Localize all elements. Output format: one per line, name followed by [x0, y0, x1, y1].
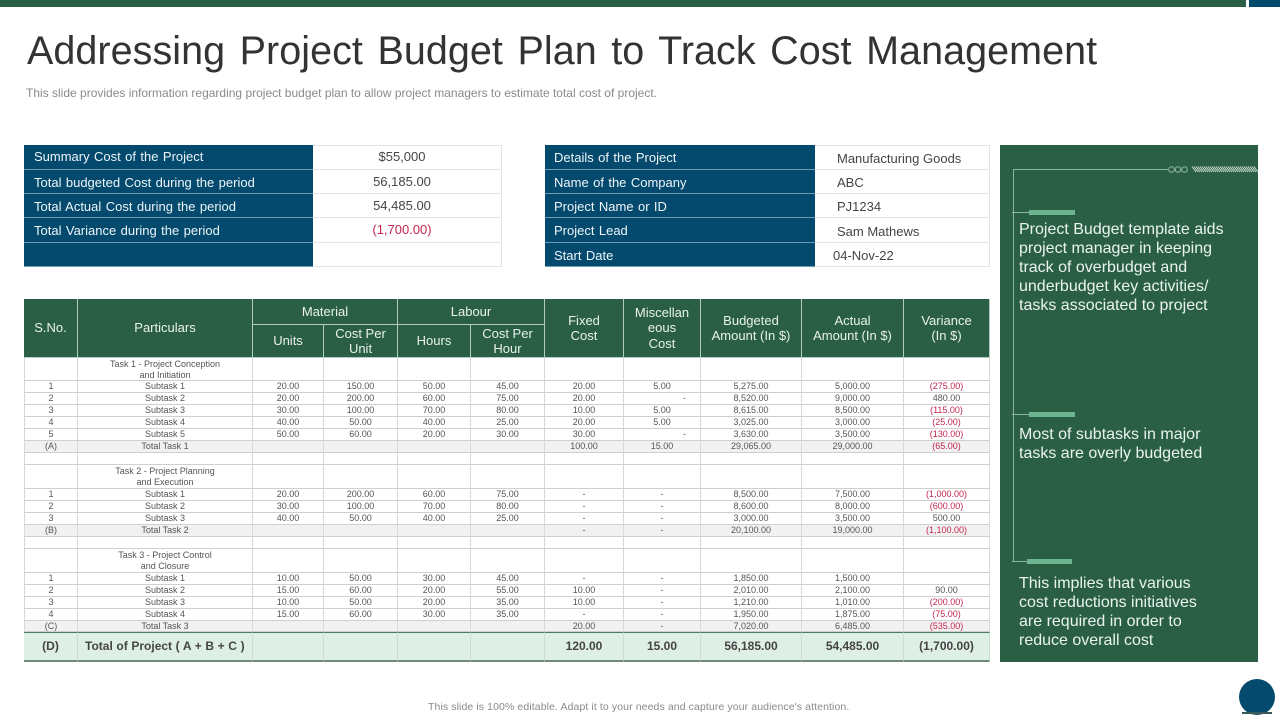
table header: [24, 299, 990, 358]
task 2 rows: Subtask 1: [145, 489, 185, 499]
summary cost table: [24, 145, 502, 267]
task 1 rows: 3,000.00: [835, 417, 870, 427]
task 1 rows: Subtask 5: [145, 429, 185, 439]
takeaway marker 1: [1012, 210, 1075, 215]
task 1 rows: 40.00: [277, 417, 299, 427]
takeaway text 1: [1019, 221, 1224, 314]
task 2 rows: 1: [48, 489, 54, 499]
summary cost table: Total budgeted Cost during the period: [34, 174, 255, 190]
subtitle: This slide provides information regarding project budget plan to allow project managers to estimate total cost of project.: [26, 86, 657, 100]
task 2 rows: 20.00: [277, 489, 299, 499]
title: Addressing Project Budget Plan to Track Cost Management: [27, 29, 1097, 73]
task 1 rows: 5.00: [653, 417, 671, 427]
task 3 rows: (75.00): [932, 609, 961, 619]
task 1 rows: Task 1 - Project Conception: [110, 358, 220, 368]
task 1 rows: (130.00): [930, 429, 963, 439]
project details table: ABC: [837, 174, 864, 190]
summary cost table: Summary Cost of the Project: [34, 148, 203, 164]
task 3 rows: Subtask 1: [145, 573, 185, 583]
grand total row: 15.00: [647, 639, 677, 653]
task 1 rows: 3,500.00: [835, 429, 870, 439]
panel: key takeaways: [1000, 145, 1258, 662]
task 3 rows: 10.00: [277, 573, 299, 583]
task 1 rows: 29,000.00: [832, 441, 873, 451]
table header: Hour: [493, 341, 522, 356]
task 1 rows: 20.00: [573, 417, 595, 427]
task 3 rows: 20.00: [423, 597, 445, 607]
takeaway text 3: [1019, 575, 1197, 649]
task 3 rows: 15.00: [277, 585, 299, 595]
task 2 rows: -: [661, 513, 664, 523]
task 1 rows: 8,500.00: [835, 405, 870, 415]
task 3 rows: 3: [48, 597, 54, 607]
task 3 rows: 20.00: [573, 621, 595, 631]
task 1 rows: (65.00): [932, 441, 961, 451]
task 2 rows: (1,000.00): [926, 489, 967, 499]
grand total row: Total of Project ( A + B + C ): [85, 639, 245, 653]
grand total row: [24, 632, 990, 662]
task 3 rows: 10.00: [277, 597, 299, 607]
table header: Budgeted: [723, 312, 779, 328]
task 2 rows: Task 2 - Project Planning: [115, 466, 215, 476]
task 2 rows: -: [661, 525, 664, 535]
task 1 rows: 100.00: [347, 405, 374, 415]
panel frame decoration: [1013, 166, 1258, 561]
task 2 rows: -: [583, 513, 586, 523]
task 1 rows: 15.00: [651, 441, 673, 451]
table header: eous: [648, 320, 676, 335]
task 2 rows: 70.00: [423, 501, 445, 511]
summary cost table: 56,185.00: [373, 174, 431, 189]
task 3 rows: 1,850.00: [733, 573, 769, 583]
task 1 rows: 20.00: [277, 381, 299, 391]
task 3 rows: 10.00: [573, 597, 595, 607]
task 1 rows: 5.00: [653, 381, 671, 391]
task 3 rows: 1,210.00: [733, 597, 769, 607]
table header: Labour: [451, 304, 491, 319]
task 1 rows: 20.00: [423, 429, 445, 439]
project details table: Start Date: [554, 248, 613, 262]
task 3 rows: -: [583, 573, 586, 583]
takeaway text 1: Project Budget template aids: [1019, 221, 1224, 238]
task 1 rows: Subtask 2: [145, 393, 185, 403]
task 1 rows: (A): [45, 441, 57, 451]
grand total row: 56,185.00: [724, 639, 778, 653]
task 3 rows: 4: [48, 609, 54, 619]
task 3 rows: 90.00: [935, 585, 958, 595]
table header: Unit: [349, 341, 372, 356]
task 1 rows: 200.00: [347, 393, 374, 403]
table header: Material: [302, 304, 348, 319]
grand total row: 120.00: [566, 639, 602, 653]
task 3 rows: -: [661, 573, 664, 583]
task 1 rows: 8,520.00: [733, 393, 769, 403]
task 1 rows: 45.00: [496, 381, 519, 391]
table header: Cost Per: [482, 326, 533, 340]
takeaway text 2: [1019, 426, 1202, 462]
task 1 rows: -: [683, 393, 686, 403]
task 1 rows: 60.00: [349, 429, 372, 439]
task 3 rows: 1,500.00: [835, 573, 870, 583]
task 2 rows: -: [583, 525, 586, 535]
task 3 rows: -: [661, 609, 664, 619]
task 1 rows: 29,065.00: [731, 441, 771, 451]
project details table: PJ1234: [837, 198, 881, 214]
task 1 rows: Subtask 1: [145, 381, 185, 391]
task 1 rows: 10.00: [573, 405, 595, 415]
task 3 rows: 2,100.00: [835, 585, 870, 595]
task 3 rows: Subtask 3: [145, 597, 185, 607]
task 3 rows: Task 3 - Project Control: [118, 550, 212, 560]
task 1 rows: 50.00: [277, 429, 299, 439]
task 1 rows: 5,000.00: [835, 381, 870, 391]
task 2 rows: 75.00: [496, 489, 519, 499]
task 2 rows: 100.00: [347, 501, 374, 511]
task 3 rows: 35.00: [496, 609, 519, 619]
summary cost table: Total Actual Cost during the period: [34, 198, 236, 214]
task 1 rows: 5: [48, 429, 54, 439]
takeaway text 1: project manager in keeping: [1019, 240, 1212, 257]
task 3 rows: 60.00: [349, 609, 372, 619]
task 2 rows: -: [661, 489, 664, 499]
task 2 rows: 60.00: [423, 489, 445, 499]
task 3 rows: 50.00: [349, 597, 372, 607]
task 2 rows: 3: [48, 513, 54, 523]
table header: Particulars: [134, 320, 196, 335]
task 2 rows: 7,500.00: [835, 489, 870, 499]
task 1 rows: 150.00: [347, 381, 374, 391]
task 2 rows: 50.00: [349, 513, 372, 523]
footer note: This slide is 100% editable. Adapt it to your needs and capture your audience's attention.: [428, 701, 849, 713]
task 2 rows: Subtask 3: [145, 513, 185, 523]
table header: Fixed: [568, 312, 600, 328]
task 2 rows: [24, 465, 990, 549]
task 3 rows: -: [661, 621, 664, 631]
project budget table: [24, 299, 990, 662]
task 1 rows: 8,615.00: [733, 405, 769, 415]
task 1 rows: and Initiation: [139, 370, 191, 380]
task 2 rows: (B): [45, 525, 57, 535]
task 3 rows: 30.00: [423, 573, 445, 583]
table header: (In $): [931, 328, 962, 343]
task 2 rows: 30.00: [277, 501, 299, 511]
task 2 rows: 2: [48, 501, 54, 511]
task 1 rows: 50.00: [423, 381, 445, 391]
task 1 rows: 3,025.00: [733, 417, 769, 427]
task 1 rows: 80.00: [496, 405, 519, 415]
task 2 rows: 8,600.00: [733, 501, 769, 511]
table header: Cost Per: [335, 326, 386, 340]
task 1 rows: 2: [48, 393, 54, 403]
task 3 rows: 1,950.00: [733, 609, 769, 619]
task 2 rows: 8,500.00: [733, 489, 769, 499]
task 3 rows: 1,010.00: [835, 597, 870, 607]
table header: Cost: [571, 328, 597, 343]
table header: Variance: [921, 312, 972, 328]
task 3 rows: 2: [48, 585, 54, 595]
task 3 rows: Subtask 4: [145, 609, 185, 619]
project details table: Project Name or ID: [554, 198, 667, 214]
table header: Miscellan: [635, 305, 689, 320]
table header: Cost: [649, 336, 675, 351]
task 3 rows: 2,010.00: [733, 585, 769, 595]
task 3 rows: (200.00): [930, 597, 963, 607]
task 1 rows: 100.00: [570, 441, 598, 451]
task 1 rows: 20.00: [277, 393, 299, 403]
takeaway text 1: track of overbudget and: [1019, 259, 1187, 276]
task 3 rows: -: [661, 597, 664, 607]
task 2 rows: -: [661, 501, 664, 511]
task 1 rows: Subtask 4: [145, 417, 185, 427]
task 1 rows: 4: [48, 417, 54, 427]
task 2 rows: (1,100.00): [926, 525, 967, 535]
project details table: Name of the Company: [554, 174, 686, 190]
task 1 rows: 20.00: [573, 381, 595, 391]
project details table: [545, 145, 990, 267]
task 3 rows: Subtask 2: [145, 585, 185, 595]
takeaway text 3: This implies that various: [1019, 575, 1191, 592]
project details table: Project Lead: [554, 222, 628, 238]
task 1 rows: (25.00): [932, 417, 961, 427]
table header: S.No.: [34, 320, 67, 335]
task 2 rows: 3,000.00: [733, 513, 769, 523]
summary cost table: Total Variance during the period: [34, 222, 220, 238]
task 3 rows: 1,875.00: [835, 609, 870, 619]
task 1 rows: (115.00): [930, 405, 963, 415]
task 1 rows: 20.00: [573, 393, 595, 403]
task 2 rows: 3,500.00: [835, 513, 870, 523]
task 1 rows: Subtask 3: [145, 405, 185, 415]
task 2 rows: and Execution: [136, 477, 194, 487]
task 3 rows: (535.00): [930, 621, 963, 631]
task 2 rows: (600.00): [930, 501, 963, 511]
takeaway marker 2: [1012, 412, 1075, 417]
summary cost table: $55,000: [378, 149, 426, 164]
task 1 rows: 60.00: [423, 393, 445, 403]
task 3 rows: [24, 549, 990, 632]
task 1 rows: 480.00: [933, 393, 960, 403]
task 1 rows: 5,275.00: [733, 381, 769, 391]
task 3 rows: 6,485.00: [835, 621, 870, 631]
task 2 rows: 500.00: [933, 513, 960, 523]
grand total row: 54,485.00: [826, 639, 879, 653]
task 1 rows: 1: [48, 381, 54, 391]
top accent bar: [0, 0, 1280, 7]
table header: Actual: [834, 312, 871, 328]
task 1 rows: 3: [48, 405, 54, 415]
task 1 rows: [24, 358, 990, 465]
task 1 rows: 40.00: [423, 417, 445, 427]
task 1 rows: 5.00: [653, 405, 671, 415]
summary cost table: 54,485.00: [373, 198, 431, 213]
task 1 rows: 9,000.00: [835, 393, 870, 403]
task 3 rows: 45.00: [496, 573, 519, 583]
task 2 rows: 200.00: [347, 489, 374, 499]
task 1 rows: 25.00: [496, 417, 519, 427]
project details table: 04-Nov-22: [833, 248, 894, 262]
task 3 rows: -: [583, 609, 586, 619]
table header: Hours: [417, 333, 451, 348]
task 3 rows: 55.00: [496, 585, 519, 595]
task 2 rows: 20,100.00: [731, 525, 771, 535]
task 3 rows: 50.00: [349, 573, 372, 583]
task 3 rows: 15.00: [277, 609, 299, 619]
task 2 rows: 40.00: [277, 513, 299, 523]
task 1 rows: Total Task 1: [141, 441, 189, 451]
task 3 rows: (C): [45, 621, 57, 631]
task 2 rows: Total Task 2: [141, 525, 189, 535]
grand total row: (D): [42, 639, 59, 653]
task 3 rows: and Closure: [141, 561, 189, 571]
table header: Amount (In $): [712, 328, 790, 343]
task 1 rows: 50.00: [349, 417, 372, 427]
task 2 rows: 80.00: [496, 501, 519, 511]
task 1 rows: 70.00: [423, 405, 445, 415]
task 1 rows: 3,630.00: [733, 429, 769, 439]
task 2 rows: Subtask 2: [145, 501, 185, 511]
task 1 rows: 30.00: [496, 429, 519, 439]
table header: Amount (In $): [813, 328, 892, 343]
task 3 rows: 20.00: [423, 585, 445, 595]
task 1 rows: -: [683, 429, 686, 439]
task 2 rows: 19,000.00: [832, 525, 873, 535]
summary cost table: (1,700.00): [372, 222, 432, 236]
icon: page badge: [1239, 679, 1275, 715]
task 2 rows: -: [583, 489, 586, 499]
task 1 rows: 30.00: [277, 405, 299, 415]
takeaway text 3: reduce overall cost: [1019, 632, 1153, 649]
task 2 rows: 40.00: [423, 513, 445, 523]
takeaway text 3: are required in order to: [1019, 613, 1182, 630]
project details table: Manufacturing Goods: [837, 151, 961, 166]
task 3 rows: 30.00: [423, 609, 445, 619]
takeaway text 1: underbudget key activities/: [1019, 278, 1208, 295]
grand total row: (1,700.00): [919, 639, 974, 653]
takeaway text 2: Most of subtasks in major: [1019, 426, 1200, 443]
task 3 rows: -: [661, 585, 664, 595]
table header: Units: [273, 333, 303, 348]
task 3 rows: 10.00: [573, 585, 595, 595]
task 2 rows: 25.00: [496, 513, 519, 523]
task 1 rows: 75.00: [496, 393, 519, 403]
takeaway text 1: tasks associated to project: [1019, 297, 1208, 314]
takeaway text 3: cost reductions initiatives: [1019, 594, 1197, 611]
task 2 rows: -: [583, 501, 586, 511]
task 1 rows: 30.00: [573, 429, 595, 439]
project details table: Details of the Project: [554, 150, 676, 164]
task 3 rows: 1: [48, 573, 54, 583]
project details table: Sam Mathews: [837, 224, 919, 238]
task 2 rows: 8,000.00: [835, 501, 870, 511]
task 1 rows: (275.00): [930, 381, 963, 391]
task 3 rows: 60.00: [349, 585, 372, 595]
takeaway marker 3: [1012, 559, 1072, 564]
task 3 rows: Total Task 3: [141, 621, 189, 631]
task 3 rows: 35.00: [496, 597, 519, 607]
takeaway text 2: tasks are overly budgeted: [1019, 445, 1202, 462]
task 3 rows: 7,020.00: [733, 621, 769, 631]
